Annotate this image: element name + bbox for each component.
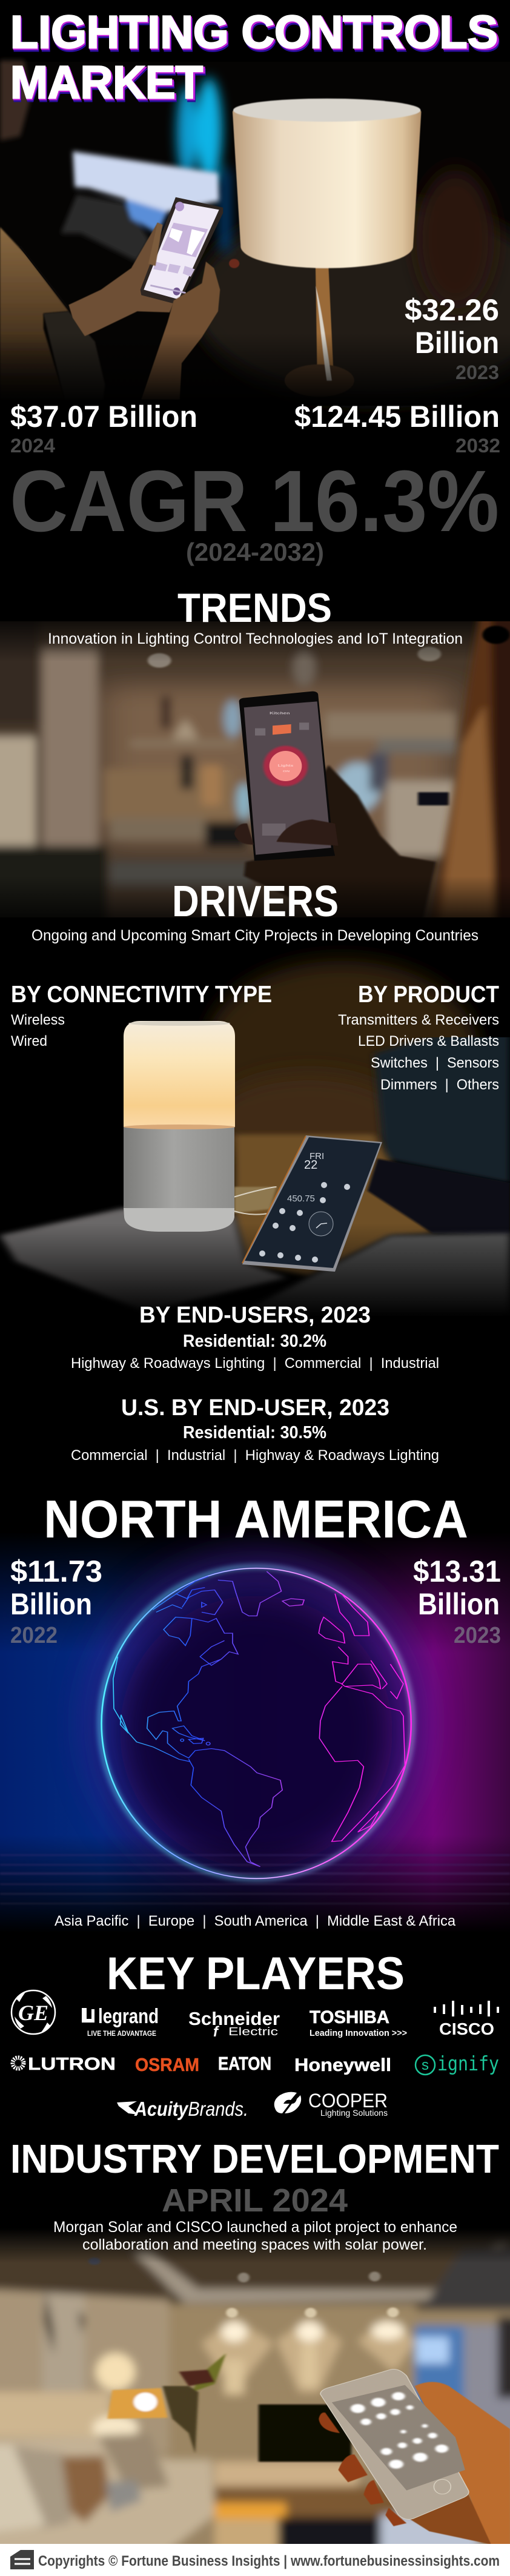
right hand (141, 262, 220, 400)
stat: 2024 value (10, 400, 197, 457)
stat: 2022 value: Billion (10, 1587, 92, 1621)
phone screen (144, 202, 219, 299)
table lamp (229, 99, 421, 397)
globe wireframe (100, 1567, 412, 1879)
table, bedding and duvet (0, 1013, 510, 1320)
stat: 2022 value: 2022 (10, 1623, 58, 1648)
logo: Cooper Lighting Solutions: COOPER (308, 2090, 388, 2112)
logo: Eaton: EATON (218, 2053, 271, 2074)
heading: TRENDS: Innovation in Lighting Control Technologies and IoT Integration (48, 630, 463, 647)
logo: Osram: OSRAM (135, 2054, 199, 2075)
segment: U.S. by end-user: U.S. BY END-USER, 2023 (121, 1395, 389, 1421)
spotlight cones (202, 2319, 416, 2392)
person, monitor and phone (0, 61, 230, 400)
segment: U.S. by end-user (71, 1395, 439, 1464)
logo: Toshiba: Leading Innovation >>> (310, 2028, 407, 2038)
logo: Signify: s (422, 2057, 429, 2073)
strap (20, 246, 71, 311)
title (10, 7, 500, 111)
logo: GE (12, 1990, 55, 2034)
logo: Cooper Lighting Solutions: Lighting Solutions (320, 2108, 388, 2118)
stat: 2023 value: $32.26 (405, 293, 499, 327)
room walls (0, 2232, 510, 2314)
ceiling and spot details (88, 2257, 399, 2317)
phone with glowing buttons (320, 2370, 469, 2519)
phone body (141, 197, 223, 305)
table lamp (107, 2388, 168, 2419)
title: MARKET (10, 57, 203, 108)
heading: KEY PLAYERS: KEY PLAYERS (107, 1948, 405, 2000)
warm wall glow (205, 961, 478, 1166)
segment: by product: BY PRODUCT (358, 982, 499, 1008)
heading: DRIVERS: DRIVERS (172, 877, 339, 926)
glow around globe (84, 1550, 429, 1895)
segment: by end-users: Highway & Roadways Lighting | Commercial | Industrial (71, 1355, 439, 1372)
development photo: room and phone (0, 2232, 510, 2544)
smartphone: Kitchen (270, 711, 290, 715)
globe ring and continents (102, 1568, 411, 1878)
other regions list: Asia Pacific | Europe | South America | Middle East & Africa (55, 1913, 456, 1929)
logo: Lutron: LUTRON (28, 2055, 116, 2074)
stat: 2024 value: 2024 (10, 435, 55, 457)
shoulder (0, 227, 68, 400)
segment: by connectivity type (11, 982, 272, 1049)
logo: Honeywell: Honeywell (294, 2055, 391, 2075)
blurred monitor (61, 151, 219, 262)
date: April 2024: APRIL 2024 (162, 2182, 348, 2219)
thumb over phone (148, 223, 162, 266)
segment: by product: Dimmers | Others (380, 1077, 499, 1093)
hero photo: lamp and phone (0, 61, 510, 406)
face (0, 61, 30, 140)
development description: collaboration and meeting spaces with solar power. (82, 2236, 427, 2253)
logo: Cisco: CISCO (439, 2020, 494, 2038)
smartphone: ON (283, 770, 290, 773)
lamp glow (96, 2353, 135, 2390)
segment: by product: Transmitters & Receivers (338, 1012, 499, 1028)
stat: 2032 value (294, 400, 500, 457)
stat: 2032 value: $124.45 Billion (294, 400, 500, 434)
stat: 2023 value (413, 1554, 501, 1648)
logo: legrand: LIVE THE ADVANTAGE (87, 2029, 156, 2038)
top fade (0, 2228, 510, 2263)
black blob top right (482, 626, 509, 644)
logo: Schneider Electric (188, 2008, 280, 2040)
logo: Signify (416, 2052, 499, 2075)
curtain at right (434, 621, 510, 917)
console and table (214, 2462, 358, 2486)
water reflections (0, 1854, 510, 1904)
blue window glow (177, 78, 230, 251)
stat: 2023 value: 2023 (455, 362, 499, 383)
bottom fade (0, 333, 510, 406)
right wall and window (416, 2325, 510, 2468)
smartphone on table: FRI (310, 1151, 324, 1161)
logo: GE: GE (18, 2001, 48, 2025)
segment: by connectivity type: BY CONNECTIVITY TYPE (11, 982, 272, 1008)
fingers over phone (234, 819, 338, 846)
development description: Morgan Solar and CISCO launched a pilot project to enhance (53, 2219, 457, 2236)
heading: NORTH AMERICA: NORTH AMERICA (44, 1489, 468, 1549)
logo: Toshiba: TOSHIBA (310, 2007, 389, 2027)
logo: Signify: ignify (437, 2052, 499, 2075)
hand (319, 2382, 510, 2545)
development description (53, 2219, 457, 2253)
segment: U.S. by end-user: Commercial | Industrial | Highway & Roadways Lighting (71, 1447, 439, 1464)
segment: by end-users: Residential: 30.2% (183, 1332, 326, 1351)
segment: by connectivity type: Wired (11, 1033, 47, 1049)
stat: 2032 value: 2032 (455, 435, 500, 457)
stat: 2023 value: 2023 (454, 1623, 501, 1648)
ceiling lights (148, 647, 449, 805)
stat: 2022 value (10, 1554, 102, 1648)
blurred room (0, 2232, 510, 2544)
CAGR: (2024-2032) (186, 538, 324, 566)
drivers photo: lamp and phone (0, 961, 510, 1341)
title: LIGHTING CONTROLS (12, 10, 500, 61)
north america background glow (0, 1532, 510, 1933)
smartphone: Lights (278, 764, 293, 767)
heading: DRIVERS: Ongoing and Upcoming Smart City Projects in Developing Countries (31, 927, 479, 944)
logo: Acuity Brands: AcuityBrands. (134, 2098, 248, 2120)
footer logo (10, 2550, 34, 2569)
logo: Schneider Electric: f (213, 2024, 219, 2040)
title: MARKET (11, 58, 205, 110)
smartphone on table: 450.75 (287, 1194, 315, 1204)
smartphone on table: 22 (304, 1158, 317, 1172)
bottom fade (0, 1223, 510, 1317)
table lamp with speaker base (124, 1021, 235, 1232)
title: LIGHTING CONTROLS (11, 8, 500, 59)
bottom fade (0, 876, 510, 917)
stat: 2022 value: $11.73 (10, 1554, 102, 1588)
segment: by product: LED Drivers & Ballasts (358, 1033, 499, 1049)
heading: TRENDS: TRENDS (177, 585, 332, 631)
stat: 2023 value: Billion (418, 1587, 500, 1621)
footer (0, 2544, 510, 2576)
logo: legrand: legrand (98, 2005, 159, 2028)
stat: 2023 value (405, 293, 499, 383)
hero backdrop (0, 62, 510, 406)
smartphone (239, 692, 335, 861)
television (259, 2405, 351, 2462)
segment: by end-users: BY END-USERS, 2023 (139, 1303, 371, 1328)
plant (162, 2353, 226, 2454)
logo: Cooper Lighting Solutions (274, 2090, 388, 2118)
segment: by product: Switches | Sensors (371, 1055, 499, 1071)
stat: 2024 value: $37.07 Billion (10, 400, 197, 434)
heading: TRENDS (0, 581, 510, 647)
heading: DRIVERS (31, 877, 479, 944)
logo: Toshiba (310, 2007, 407, 2038)
stat: 2023 value: $13.31 (413, 1554, 501, 1588)
left hand and arm (68, 223, 174, 336)
title: MARKET (12, 60, 205, 111)
logo: legrand (82, 2005, 159, 2038)
segment: U.S. by end-user: Residential: 30.5% (183, 1423, 326, 1442)
segment: by connectivity type: Wireless (11, 1012, 65, 1028)
segment: by product (338, 982, 499, 1093)
blurred kitchen (0, 621, 480, 917)
logo: Cisco (434, 2001, 499, 2038)
logo: Schneider Electric: Schneider (188, 2008, 280, 2029)
segment: by end-users (71, 1303, 439, 1372)
logo: Schneider Electric: Electric (228, 2026, 278, 2038)
tray ceiling (13, 2279, 174, 2305)
stat: 2023 value: Billion (415, 326, 499, 360)
top shading (0, 621, 482, 658)
trends photo (0, 621, 510, 917)
hand holding phone (244, 765, 436, 920)
title: LIGHTING CONTROLS (10, 7, 498, 58)
smartphone on table (242, 1135, 382, 1272)
top garment (44, 311, 105, 400)
sofa (0, 2437, 214, 2565)
